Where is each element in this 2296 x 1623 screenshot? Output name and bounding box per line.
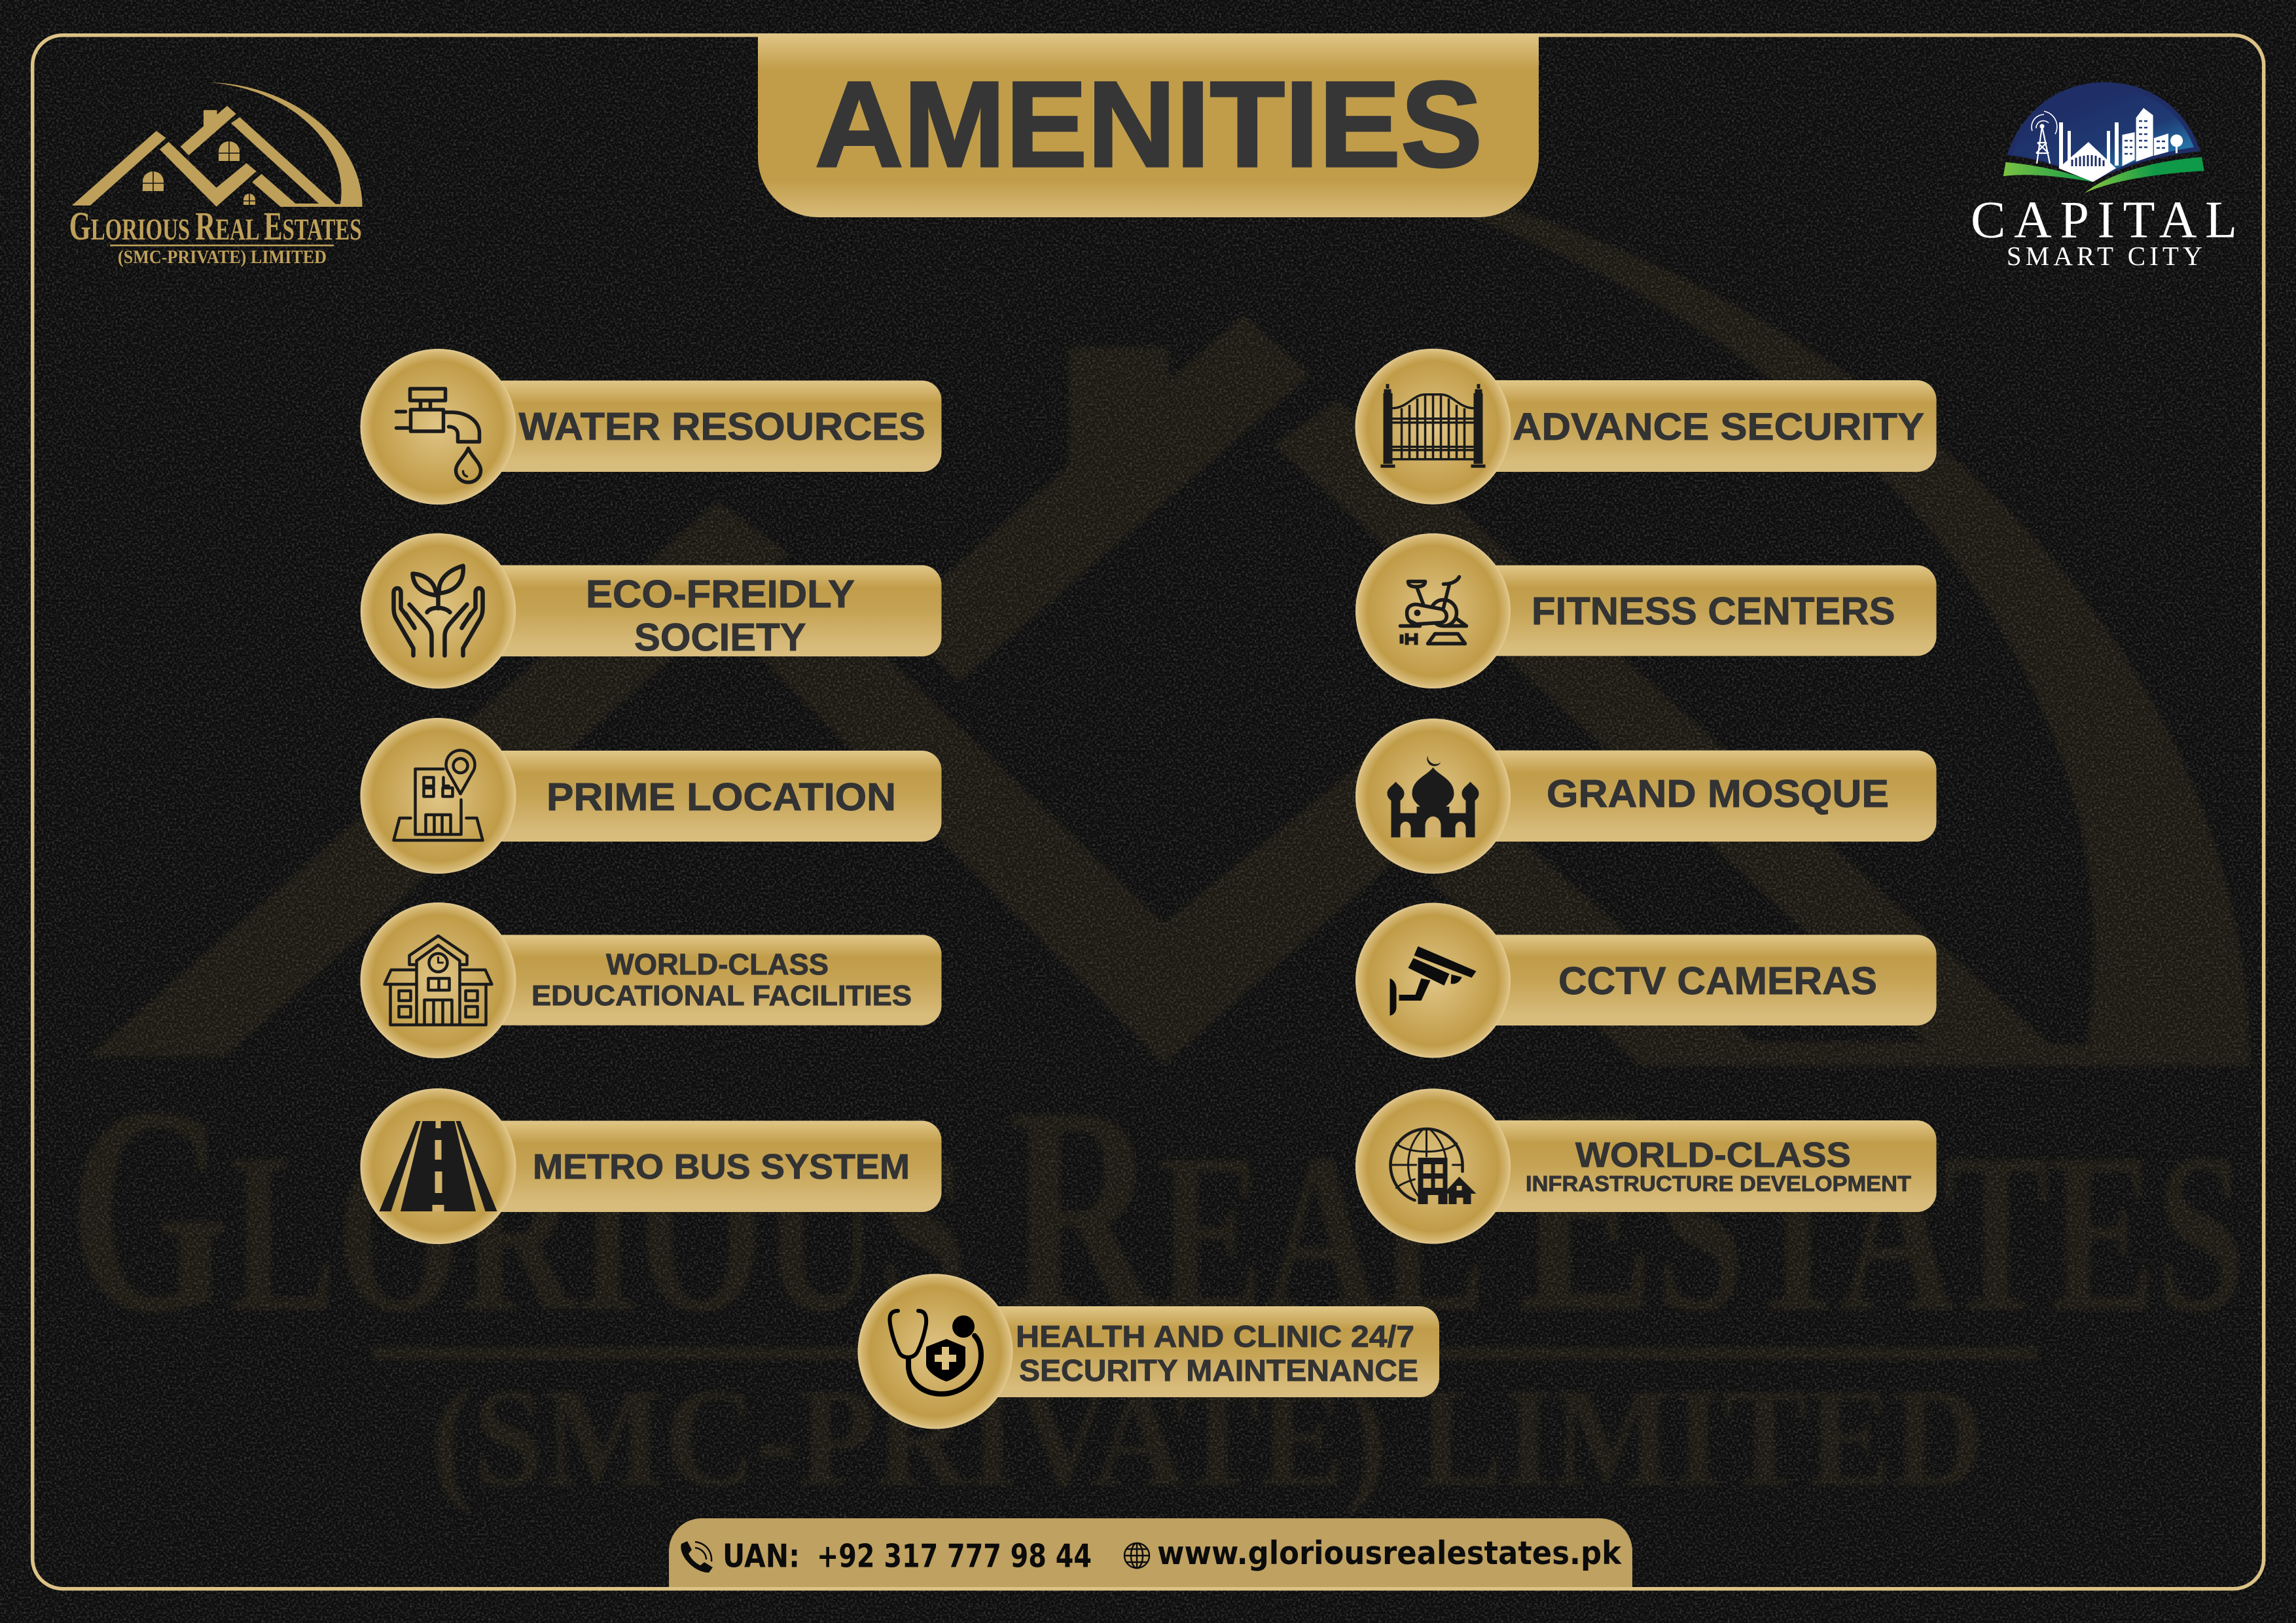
label: WORLD-CLASS <box>1575 1135 1851 1175</box>
label <box>531 948 912 1012</box>
panel: grand mosque <box>1355 719 1937 874</box>
panel: advance security <box>1355 349 1937 505</box>
panel: water resources <box>360 349 941 505</box>
footer contact bar <box>669 1518 1632 1587</box>
label: SOCIETY <box>634 615 806 659</box>
phone number <box>723 1538 1092 1575</box>
icon: school <box>385 936 492 1025</box>
icon: globe <box>1124 1543 1149 1568</box>
label <box>1526 1135 1912 1196</box>
panel: eco-friendly society <box>361 533 941 688</box>
icon: gate <box>1381 384 1486 468</box>
label: METRO BUS SYSTEM <box>533 1147 910 1186</box>
label: PRIME LOCATION <box>547 776 896 819</box>
title tab <box>758 33 1539 217</box>
label: SECURITY MAINTENANCE <box>1019 1353 1418 1387</box>
label: ADVANCE SECURITY <box>1513 406 1924 448</box>
label: HEALTH AND CLINIC 24/7 <box>1016 1319 1414 1353</box>
panel: fitness centers <box>1355 533 1937 688</box>
icon: cctv camera <box>1390 946 1477 1016</box>
phone number: +92 317 777 98 44 <box>817 1538 1092 1575</box>
label <box>1016 1319 1418 1387</box>
icon: hands with plant <box>394 566 483 656</box>
icon: tap <box>397 389 480 482</box>
label: WORLD-CLASS <box>606 948 829 981</box>
label: INFRASTRUCTURE DEVELOPMENT <box>1526 1172 1912 1196</box>
label: GRAND MOSQUE <box>1547 772 1889 815</box>
logo: Glorious Real Estates <box>69 82 363 268</box>
icon: logo windows <box>143 141 255 205</box>
icon: stethoscope with shield <box>889 1311 981 1394</box>
label: EDUCATIONAL FACILITIES <box>531 980 912 1012</box>
label <box>586 572 855 659</box>
icon: exercise bike <box>1399 577 1466 645</box>
logo: Capital Smart City <box>1971 82 2237 271</box>
panel: cctv cameras <box>1355 903 1937 1058</box>
icon: road <box>380 1121 497 1211</box>
logo name: CAPITAL <box>1971 191 2237 249</box>
panel: metro bus system <box>360 1088 941 1244</box>
logo subtitle: (SMC-PRIVATE) LIMITED <box>118 247 327 268</box>
icon: green swooshes <box>2003 157 2204 193</box>
phone number: UAN: <box>723 1538 800 1575</box>
icon: skyline <box>2032 108 2183 182</box>
website: www.gloriousrealestates.pk <box>1157 1535 1622 1572</box>
icon: globe with buildings <box>1390 1129 1477 1204</box>
watermark: large faint logo: (SMC-PRIVATE) LIMITED <box>431 1359 1984 1516</box>
panel: infrastructure development <box>1355 1088 1937 1244</box>
label: ECO-FREIDLY <box>586 572 855 616</box>
icon: phone <box>681 1541 713 1573</box>
panel: prime location <box>360 718 941 874</box>
heading: AMENITIES <box>815 57 1482 192</box>
label: CCTV CAMERAS <box>1558 959 1877 1003</box>
logo subtitle: SMART CITY <box>2007 241 2202 271</box>
logo name: GLORIOUS REAL ESTATES <box>69 205 362 249</box>
panel: educational facilities <box>360 902 941 1058</box>
label: WATER RESOURCES <box>518 404 925 448</box>
label: FITNESS CENTERS <box>1532 590 1895 633</box>
icon: building with pin <box>394 750 483 840</box>
panel: health and clinic <box>857 1274 1439 1429</box>
icon: mosque <box>1388 755 1479 838</box>
